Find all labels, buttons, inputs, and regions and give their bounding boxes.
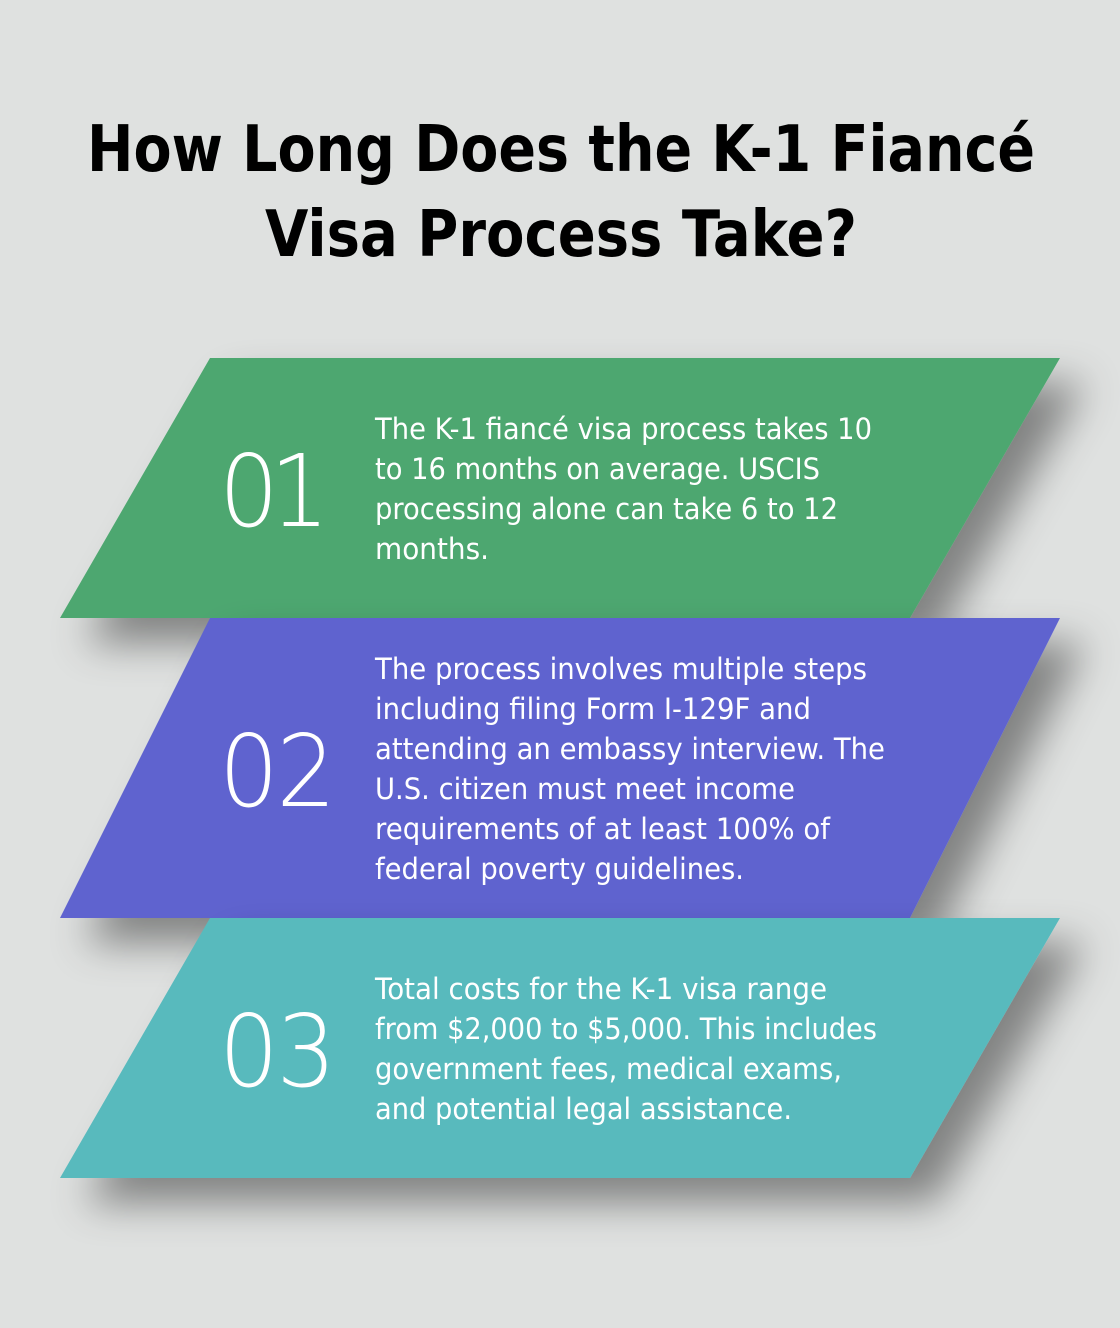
step 02 text: including filing Form I-129F and [375,692,811,726]
step 01 text: to 16 months on average. USCIS [375,452,820,486]
panel: step 01 [60,358,1060,618]
step 02 text: The process involves multiple steps [374,652,867,686]
step 02 text: federal poverty guidelines. [375,852,744,886]
step 01 text: The K-1 fiancé visa process takes 10 [374,412,872,446]
step 03 number: 03 [219,993,336,1110]
step 03 text: and potential legal assistance. [375,1092,792,1126]
step 02 number: 02 [219,713,336,830]
step 01 text: processing alone can take 6 to 12 [375,492,838,526]
step 01 background [60,358,1060,618]
step 03 text: Total costs for the K-1 visa range [374,972,827,1006]
step 02 text: requirements of at least 100% of [375,812,831,846]
step 02 text: U.S. citizen must meet income [375,772,795,806]
step 01 text [374,412,872,566]
step 01 number: 01 [219,433,330,550]
step 02 text [374,652,885,886]
step 03 text: government fees, medical exams, [375,1052,842,1086]
step 03 background [60,918,1060,1178]
panel: step 02 [60,618,1060,918]
panel: step 03 [60,918,1060,1178]
step 03 text [374,972,877,1126]
title: Visa Process Take? [265,198,857,272]
step 01 text: months. [375,532,489,566]
step 02 text: attending an embassy interview. The [375,732,885,766]
step 03 text: from $2,000 to $5,000. This includes [375,1012,877,1046]
title [87,113,1035,272]
step 02 background [60,618,1060,918]
